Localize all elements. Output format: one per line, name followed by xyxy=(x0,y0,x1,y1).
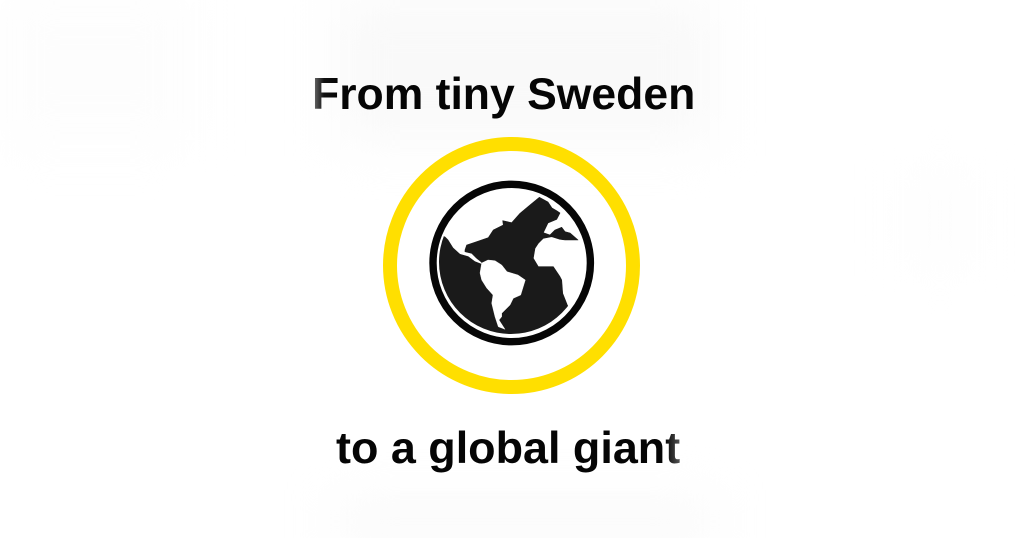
icon: globe in yellow ring xyxy=(383,137,640,394)
yellow ring xyxy=(390,144,633,387)
South America xyxy=(480,260,525,329)
globe outline xyxy=(433,184,590,342)
heading: From tiny Sweden: From tiny Sweden xyxy=(312,70,695,119)
heading: to a global giant: to a global giant xyxy=(336,422,680,473)
globe map xyxy=(439,197,578,334)
